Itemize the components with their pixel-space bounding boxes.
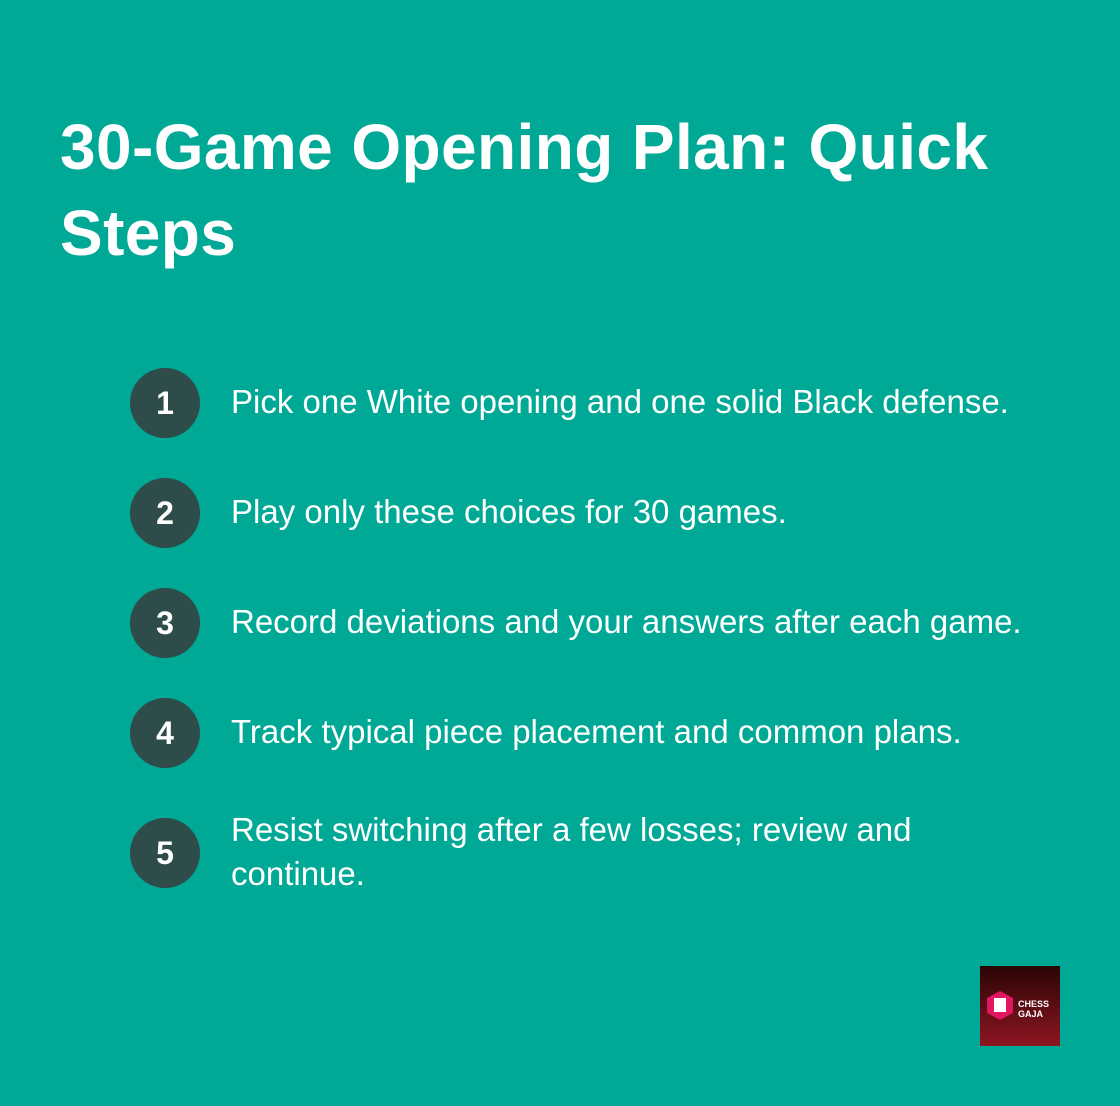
step 2: 2 [156, 495, 174, 531]
step 3 [130, 588, 1022, 658]
step 1: Pick one White opening and one solid Black defense. [231, 383, 1009, 420]
step 1: 1 [156, 385, 174, 421]
step 5: 5 [156, 835, 174, 871]
title: 30-Game Opening Plan: Quick [60, 111, 988, 183]
logo: GAJA [1018, 1009, 1044, 1019]
title: Steps [60, 197, 236, 269]
step 4: Track typical piece placement and common plans. [231, 713, 962, 750]
logo: CHESS [1018, 999, 1049, 1009]
logo [980, 966, 1060, 1046]
step 3: 3 [156, 605, 174, 641]
title [60, 111, 988, 269]
step 5: continue. [231, 855, 365, 892]
step 2: Play only these choices for 30 games. [231, 493, 787, 530]
step 5 [130, 811, 911, 892]
step 4: 4 [156, 715, 174, 751]
step 2 [130, 478, 787, 548]
step 3: Record deviations and your answers after each game. [231, 603, 1022, 640]
step 5: Resist switching after a few losses; review and [231, 811, 911, 848]
step 4 [130, 698, 962, 768]
step 1 [130, 368, 1009, 438]
